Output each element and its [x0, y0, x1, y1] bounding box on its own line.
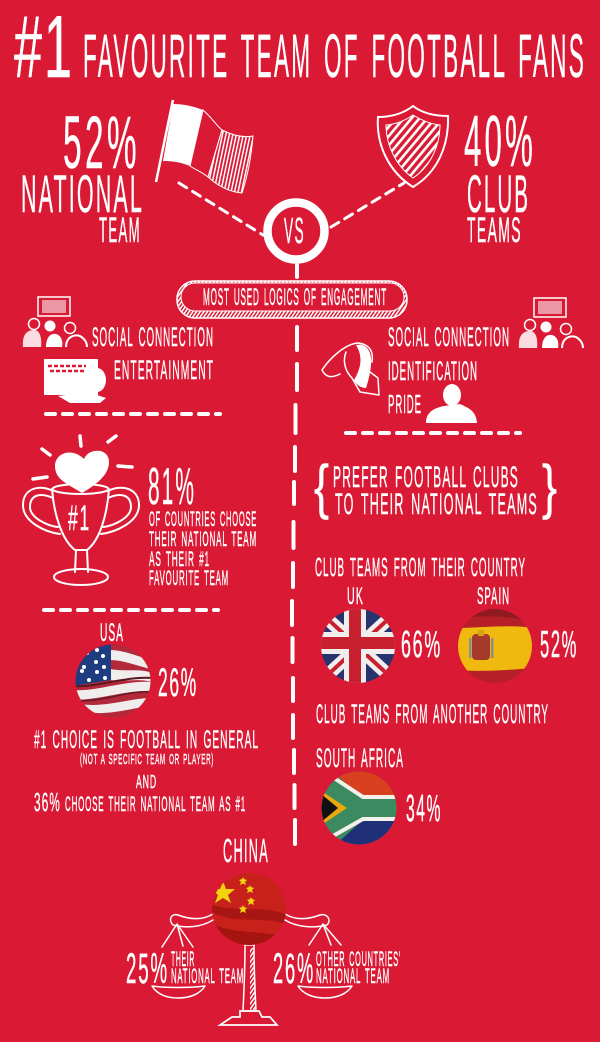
- text: #1 CHOICE IS FOOTBALL IN GENERAL: [34, 726, 259, 754]
- title: [14, 0, 586, 96]
- icon: woman with scarf: [322, 343, 379, 395]
- stat: 81% of countries: [148, 458, 257, 590]
- icon: people watching tv (right): [519, 298, 583, 348]
- icon: trophy with heart: [23, 436, 139, 585]
- text: 52%: [63, 101, 140, 184]
- icon: South Africa flag: [320, 770, 398, 846]
- text: 66%: [401, 624, 442, 666]
- callout: prefer football clubs: }: [542, 453, 557, 520]
- stat: 81% of countries: AS THEIR #1: [149, 548, 210, 571]
- text: ENTERTAINMENT: [114, 355, 214, 385]
- icon: shield: [378, 106, 448, 187]
- text: 34%: [406, 788, 442, 830]
- text: THEIR NATIONAL TEAM: [149, 528, 257, 551]
- divider: left lower: [44, 608, 218, 612]
- text: USA: [100, 619, 124, 647]
- arrow: dashed connector flag to vs: [179, 183, 263, 235]
- icon: Spain flag: [456, 608, 534, 684]
- divider: right: [346, 431, 520, 435]
- stat: national team 52%: [21, 101, 144, 250]
- text: SPAIN: [477, 583, 510, 610]
- divider: left upper: [46, 412, 220, 416]
- callout: prefer football clubs: {: [314, 453, 329, 520]
- text block: USA details: (NOT A SPECIFIC TEAM OR PLAYER): [80, 751, 214, 768]
- text: CHOOSE THEIR NATIONAL TEAM AS #1: [65, 793, 246, 816]
- icon: balance scale: [152, 914, 352, 1025]
- vs badge: VS: [284, 210, 305, 251]
- text: NATIONAL: [21, 165, 144, 224]
- text: SOCIAL CONNECTION: [92, 322, 214, 352]
- text: 26%: [158, 661, 198, 705]
- text: UK: [347, 583, 364, 610]
- callout: prefer football clubs: [314, 453, 557, 521]
- text: TEAM: [99, 211, 141, 250]
- stat: club teams 40%: [464, 102, 536, 250]
- stat: China 26% other countries' national team: 26%: [273, 945, 315, 993]
- icon: China flag: [212, 873, 286, 945]
- text: NATIONAL TEAM: [316, 965, 390, 988]
- icon: flag: [156, 100, 253, 193]
- icon: people watching tv (left): [23, 297, 87, 347]
- stat: China 25% their national team: 25%: [126, 945, 169, 993]
- text: PRIDE: [388, 389, 422, 419]
- text: NATIONAL TEAM: [171, 965, 244, 988]
- vs badge: [268, 202, 324, 277]
- banner: most used logics of engagement: [177, 281, 407, 318]
- text: OTHER COUNTRIES': [316, 948, 401, 971]
- arrow: dashed connector shield to vs: [331, 183, 404, 227]
- text: OF COUNTRIES CHOOSE: [149, 508, 257, 531]
- stat: 81% of countries: FAVOURITE TEAM: [149, 567, 229, 590]
- icon: proud man: [426, 384, 477, 423]
- text: CHINA: [223, 832, 269, 869]
- stat: 81% of countries: 81%: [148, 458, 196, 516]
- icon: trophy with heart: #1: [68, 499, 91, 538]
- text block: USA details: 36%: [34, 787, 61, 817]
- icon: USA flag: [74, 643, 152, 719]
- stat: China 25% their national team: THEIR: [171, 948, 195, 971]
- text block: USA details: [34, 726, 259, 817]
- icon: person at screen: [44, 359, 106, 403]
- text block: USA details: AND: [136, 772, 157, 792]
- text: SOUTH AFRICA: [316, 743, 404, 773]
- icon: UK flag: [320, 606, 396, 686]
- central dashed divider: [292, 327, 297, 844]
